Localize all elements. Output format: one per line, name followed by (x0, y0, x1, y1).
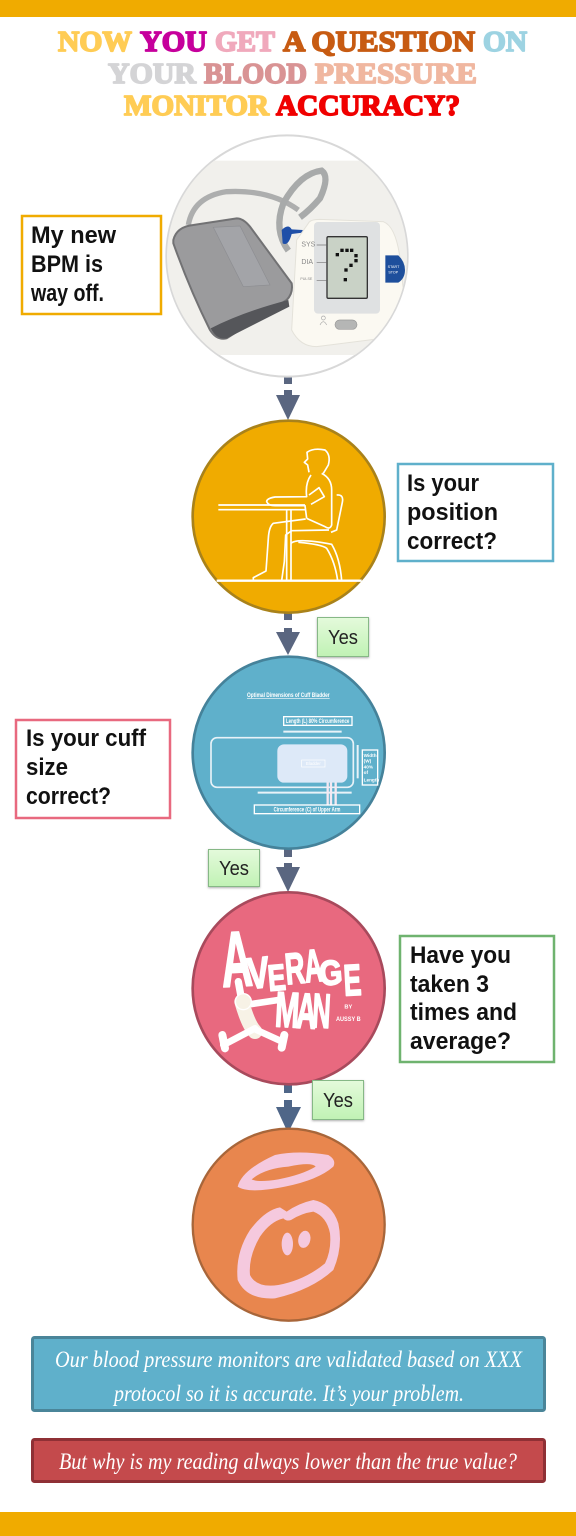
circle: average man logo: A (302, 939, 325, 992)
circle: cuff dimensions diagram: Bladder (306, 761, 321, 766)
circle: cuff dimensions diagram: 40% (364, 764, 374, 769)
callout: position: Is your (407, 470, 479, 497)
yes label 3: Yes (323, 1090, 353, 1112)
callout: cuff size (16, 720, 170, 818)
title: NOW (58, 26, 132, 58)
callout: my new BPM (22, 216, 161, 314)
photo circle: blood pressure monitor: START (388, 265, 400, 269)
title (58, 26, 527, 122)
circle: average man logo: N (311, 984, 332, 1039)
banner: why lower (32, 1440, 544, 1482)
photo circle: blood pressure monitor: SYS (301, 242, 316, 249)
circle: average man logo: E (266, 956, 287, 999)
title: MONITOR (124, 90, 270, 122)
circle: average man logo: BY (344, 1004, 352, 1010)
circle: cuff dimensions diagram: Circumference (C) of Upper Arm (274, 807, 340, 813)
callout: my new BPM: BPM is (31, 251, 103, 278)
title: YOU (140, 26, 207, 58)
circle: correct sitting position (193, 421, 385, 613)
circle: average man logo: A (295, 982, 318, 1040)
circle: angel face (193, 1129, 385, 1321)
callout: taken 3 times: average? (410, 1028, 511, 1055)
top band (0, 0, 576, 17)
circle: average man logo: A (219, 916, 254, 1004)
photo circle: blood pressure monitor (160, 135, 420, 377)
circle: average man logo: G (318, 953, 344, 993)
callout: my new BPM: way off. (30, 280, 104, 307)
banner: validated protocol: Our blood pressure monitors are validated based on XXX (55, 1347, 523, 1372)
circle: average man logo: AUSSY B (336, 1017, 361, 1023)
title: ON (483, 26, 527, 58)
arrow: average to result (276, 1085, 301, 1133)
callout: position: correct? (407, 528, 497, 555)
title: GET (215, 26, 275, 58)
callout: taken 3 times (400, 936, 554, 1062)
banner: validated protocol: protocol so it is accurate. It’s your problem. (112, 1381, 464, 1406)
title: A QUESTION (283, 26, 475, 58)
banner: validated protocol (32, 1338, 544, 1410)
circle: average man logo: M (274, 981, 301, 1039)
callout: position: position (407, 499, 498, 526)
circle: cuff dimensions diagram (193, 657, 385, 849)
circle: average man logo: V (245, 948, 272, 999)
circle: cuff dimensions diagram: Optimal Dimensions of Cuff Bladder (247, 692, 330, 699)
yes label 2: Yes (219, 858, 249, 880)
banner: why lower: But why is my reading always lower than the true value? (59, 1449, 517, 1474)
title: YOUR (108, 58, 197, 90)
callout: taken 3 times: taken 3 (410, 971, 489, 998)
callout: cuff size: size (26, 754, 68, 781)
circle: cuff dimensions diagram: Width (364, 753, 377, 758)
title: PRESSURE (315, 58, 477, 90)
circle: average man logo: R (283, 943, 307, 994)
circle: average man logo: E (342, 955, 362, 1005)
circle: average man logo (193, 892, 385, 1084)
photo circle: blood pressure monitor: STOP (388, 271, 399, 275)
callout: cuff size: Is your cuff (26, 725, 147, 752)
arrow: cuff to average (276, 849, 300, 892)
arrow: monitor to position (276, 377, 300, 420)
bottom band (0, 1512, 576, 1536)
yes label 1: Yes (328, 627, 358, 649)
circle: cuff dimensions diagram: Length (364, 777, 379, 782)
callout: taken 3 times: times and (410, 999, 517, 1026)
title: ACCURACY? (276, 90, 460, 122)
title: BLOOD (204, 58, 307, 90)
arrow: position to cuff (276, 613, 300, 655)
callout: cuff size: correct? (26, 783, 111, 810)
circle: cuff dimensions diagram: (W) (364, 759, 372, 764)
circle: cuff dimensions diagram: Length (L) 80% Circumference (286, 719, 350, 725)
photo circle: blood pressure monitor: PULSE (300, 277, 313, 281)
circle: cuff dimensions diagram: of (364, 770, 369, 775)
yes label 3 (312, 1080, 364, 1120)
yes label 2 (208, 850, 260, 886)
callout: taken 3 times: Have you (410, 942, 511, 969)
callout: position (398, 464, 553, 561)
yes label 1 (318, 618, 368, 656)
photo circle: blood pressure monitor: DIA (301, 259, 313, 266)
callout: my new BPM: My new (31, 222, 116, 249)
